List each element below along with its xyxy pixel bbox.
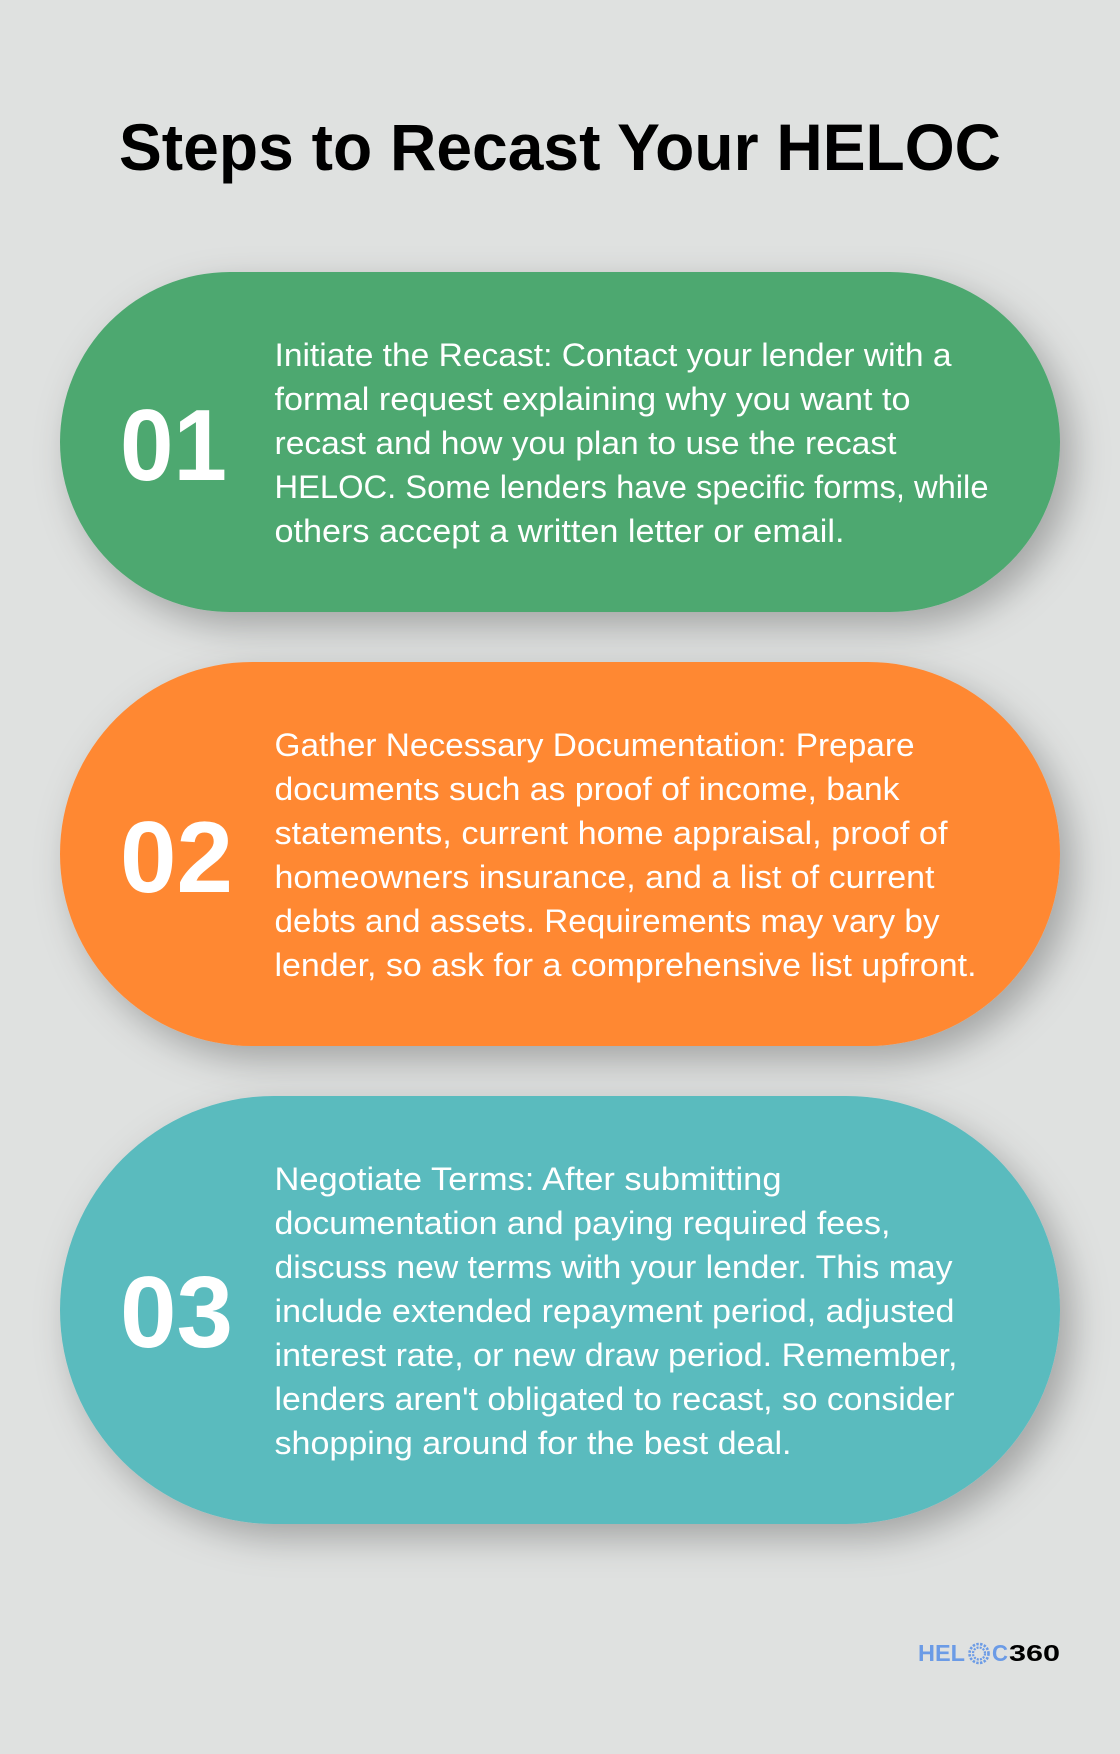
text block: step 3: discuss new terms with your lender. This may bbox=[274, 1249, 952, 1285]
title: Steps to Recast Your HELOC bbox=[119, 110, 1001, 184]
icon: spinner letter O bbox=[970, 1644, 988, 1663]
text block: step 1: others accept a written letter or email. bbox=[274, 513, 844, 549]
text block: step 1 bbox=[274, 337, 988, 549]
text block: step 3: shopping around for the best deal. bbox=[274, 1425, 792, 1461]
number: 01: 01 bbox=[120, 390, 227, 502]
pill: step 3 background bbox=[60, 1096, 1060, 1524]
logo: HELOC360: C bbox=[992, 1640, 1008, 1666]
text block: step 2: Gather Necessary Documentation: Prepare bbox=[274, 727, 914, 763]
text block: step 2: lender, so ask for a comprehensive list upfront. bbox=[274, 947, 976, 983]
number: 02: 02 bbox=[120, 802, 233, 914]
logo: HELOC360: HEL bbox=[918, 1640, 965, 1666]
text block: step 2 bbox=[274, 727, 976, 983]
panel: step 2 bbox=[60, 662, 1060, 1046]
text block: step 3: include extended repayment period, adjusted bbox=[274, 1293, 954, 1329]
text block: step 3: interest rate, or new draw period. Remember, bbox=[274, 1337, 958, 1373]
pill: step 2 background bbox=[60, 662, 1060, 1046]
logo: HELOC360: 360 bbox=[1009, 1640, 1060, 1666]
text block: step 1: recast and how you plan to use the recast bbox=[274, 425, 897, 461]
text block: step 2: debts and assets. Requirements may vary by bbox=[274, 903, 940, 939]
text block: step 3 bbox=[274, 1161, 958, 1461]
text block: step 1: Initiate the Recast: Contact your lender with a bbox=[274, 337, 952, 373]
text block: step 3: lenders aren't obligated to recast, so consider bbox=[274, 1381, 955, 1417]
text block: step 1: HELOC. Some lenders have specific forms, while bbox=[274, 469, 988, 505]
text block: step 2: documents such as proof of income, bank bbox=[274, 771, 901, 807]
text block: step 2: statements, current home appraisal, proof of bbox=[274, 815, 948, 851]
text block: step 1: formal request explaining why you want to bbox=[274, 381, 910, 417]
text block: step 2: homeowners insurance, and a list of current bbox=[274, 859, 935, 895]
pill: step 1 background bbox=[60, 272, 1060, 612]
text block: step 3: Negotiate Terms: After submitting bbox=[274, 1161, 782, 1197]
number: 03: 03 bbox=[120, 1257, 233, 1369]
panel: step 1 bbox=[60, 272, 1060, 612]
text block: step 3: documentation and paying required fees, bbox=[274, 1205, 890, 1241]
panel: step 3 bbox=[60, 1096, 1060, 1524]
logo: HELOC360 bbox=[918, 1640, 1060, 1666]
